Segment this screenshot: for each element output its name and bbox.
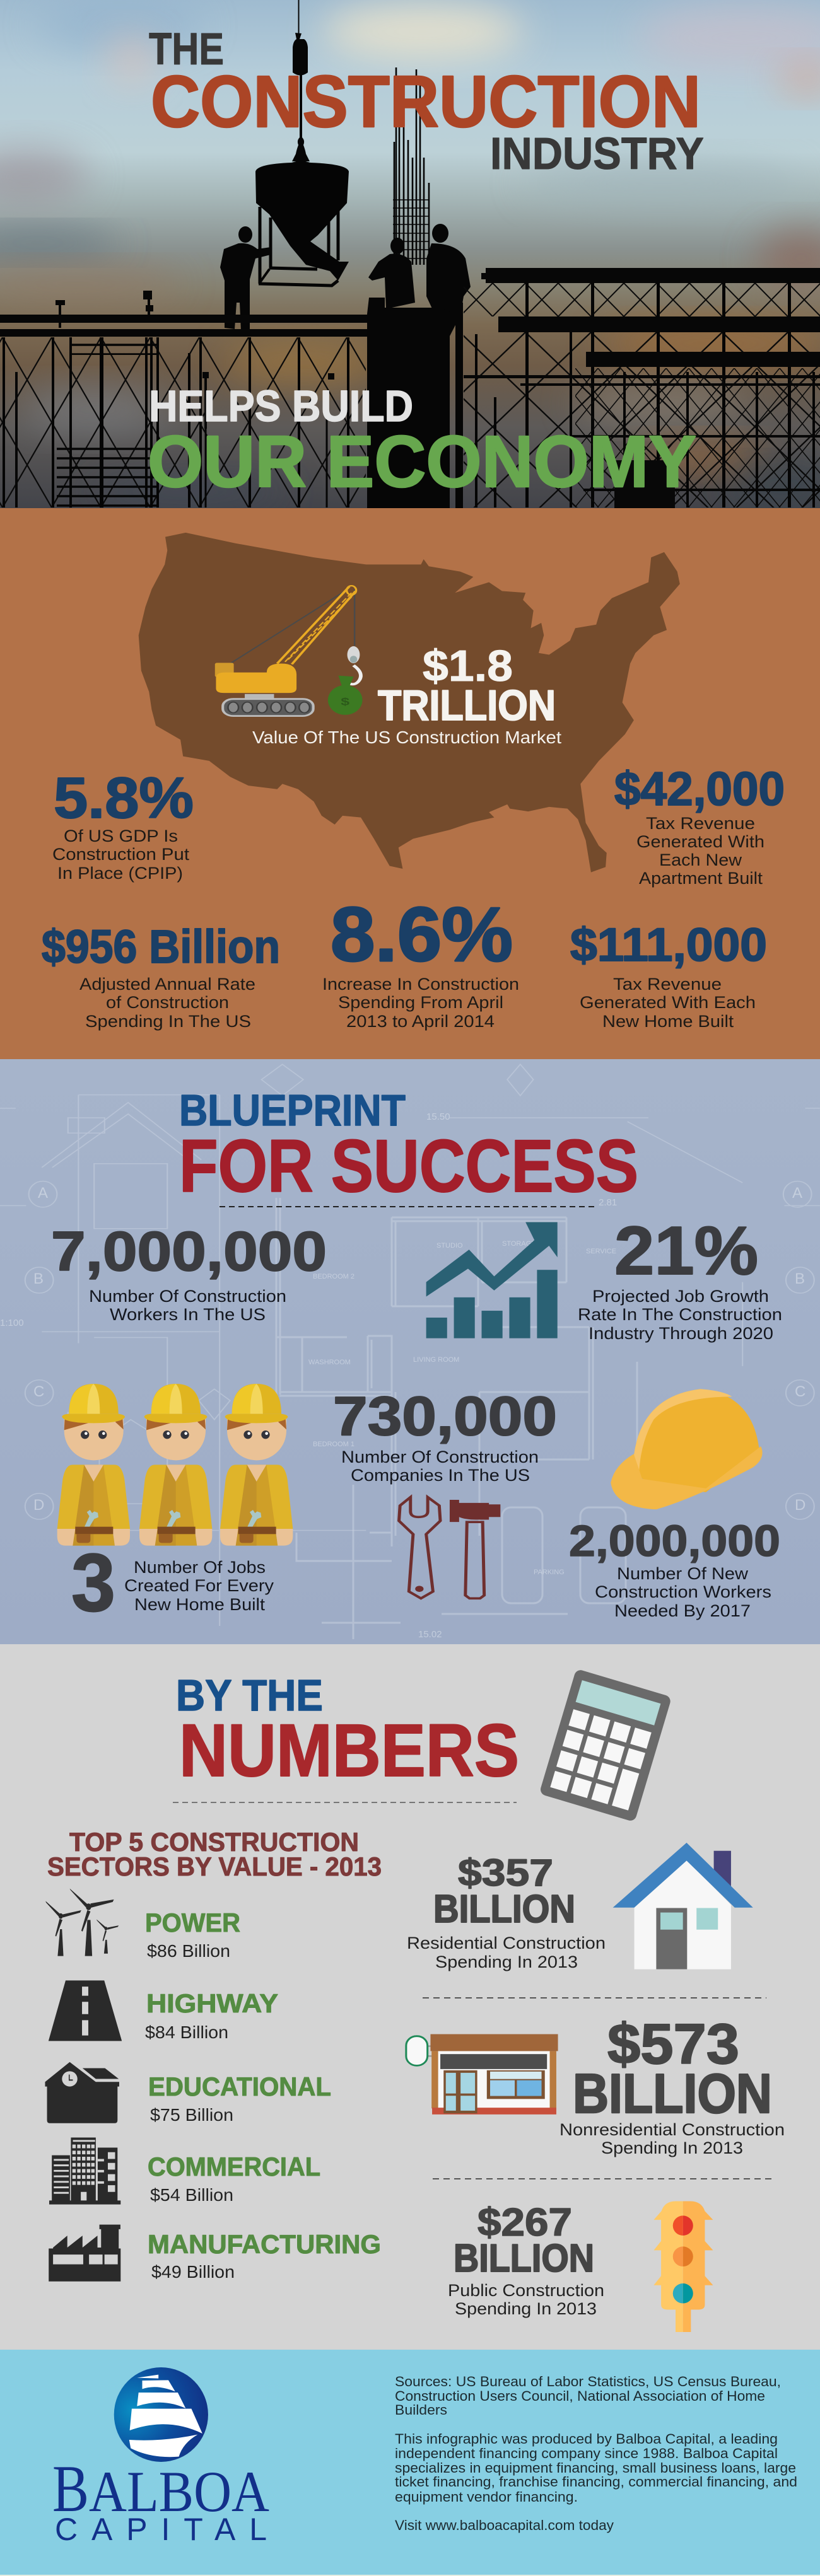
stat: $267 billion public: Public Construction <box>448 2281 604 2300</box>
workers silhouettes <box>220 224 471 337</box>
panel: blueprint for success: C <box>795 1383 805 1400</box>
sector: power: POWER <box>145 1908 240 1937</box>
stat: 8.6% <box>322 891 519 1031</box>
stat: 3 jobs <box>71 1536 274 1628</box>
title: The Construction Industry: THE <box>149 25 224 74</box>
sector: highway <box>145 1988 278 2042</box>
heading: By the Numbers <box>176 1671 519 1792</box>
stat: 3 jobs: Created For Every <box>124 1576 274 1595</box>
panel: blueprint for success: A <box>792 1185 802 1202</box>
icon: storefront <box>406 2034 558 2115</box>
stat: 3 jobs: Number Of Jobs <box>134 1558 266 1577</box>
icon: wrench and hammer <box>399 1497 500 1598</box>
stat: 8.6%: Increase In Construction <box>322 975 519 994</box>
stat: $42,000 <box>614 762 785 888</box>
panel: blueprint for success: SERVICE <box>586 1248 616 1255</box>
panel: hero <box>0 0 820 508</box>
logo: Balboa Capital: B <box>52 2452 89 2526</box>
icon: three workers <box>57 1384 293 1546</box>
stat: 21% <box>578 1212 782 1343</box>
stat: $111,000: Generated With Each <box>580 993 756 1012</box>
sector: educational <box>148 2072 331 2125</box>
stat: $956 Billion: $956 Billion <box>42 920 280 973</box>
panel: footer <box>0 2350 820 2576</box>
icon: house <box>613 1843 753 1970</box>
sector: manufacturing: $49 Billion <box>151 2262 235 2282</box>
panel: by the numbers <box>0 1644 820 2350</box>
icon: factory <box>49 2225 120 2282</box>
stat: $1.8 trillion: $1.8 <box>423 641 513 690</box>
sector: highway: HIGHWAY <box>146 1988 278 2018</box>
panel: blueprint for success: STORAGE <box>502 1240 536 1248</box>
stat: $1.8 trillion: Value Of The US Construction Market <box>252 728 561 747</box>
text: about: equipment vendor financing. <box>395 2489 578 2505</box>
stat: $573 billion nonresidential <box>559 2013 785 2157</box>
stat: 730,000: Companies In The US <box>351 1466 530 1485</box>
text: sources: Sources: US Bureau of Labor Statistics, US Census Bureau, <box>395 2374 781 2389</box>
rebar column <box>393 67 429 265</box>
stat: 21%: 21% <box>614 1212 758 1289</box>
stat: 7,000,000: Workers In The US <box>110 1305 266 1324</box>
stat: 2,000,000 <box>569 1516 780 1620</box>
sector: manufacturing <box>148 2229 381 2282</box>
panel: blueprint for success: STUDIO <box>436 1242 463 1250</box>
stat: 2,000,000: Construction Workers <box>595 1582 771 1601</box>
stat: $573 billion nonresidential: Nonresidential Construction <box>559 2120 785 2139</box>
stat: 5.8%: Construction Put <box>52 845 190 864</box>
title: Helps Build Our Economy: OUR ECONOMY <box>148 421 696 502</box>
stat: 7,000,000 <box>51 1220 327 1324</box>
stat: $573 billion nonresidential: BILLION <box>573 2062 772 2125</box>
sector: manufacturing: MANUFACTURING <box>148 2229 381 2259</box>
text: sources: Construction Users Council, National Association of Home <box>395 2388 765 2404</box>
bucket frame <box>259 207 338 286</box>
panel: blueprint for success: D <box>33 1497 44 1514</box>
sector: highway: $84 Billion <box>145 2022 228 2042</box>
stat: $1.8 trillion: TRILLION <box>378 682 556 729</box>
stat: $357 billion residential <box>407 1852 606 1971</box>
stat: 2,000,000: 2,000,000 <box>569 1516 780 1565</box>
heading: Blueprint for Success <box>179 1086 638 1208</box>
stat: $42,000: Generated With <box>636 832 764 851</box>
left scaffolding <box>0 291 367 508</box>
title: Helps Build Our Economy <box>148 381 696 502</box>
panel: blueprint for success: 2.81 <box>599 1197 617 1208</box>
heading: top 5 sectors <box>47 1827 382 1881</box>
heading: Blueprint for Success: FOR SUCCESS <box>179 1125 638 1208</box>
stat: 730,000: 730,000 <box>333 1386 557 1447</box>
stat: 8.6%: 8.6% <box>331 891 513 977</box>
heading: By the Numbers: BY THE <box>176 1671 323 1720</box>
panel: economy stats <box>0 508 820 1059</box>
central concrete column <box>367 298 463 508</box>
heading: By the Numbers: NUMBERS <box>179 1709 519 1792</box>
stat: $111,000: Tax Revenue <box>613 975 722 994</box>
icon: calculator <box>539 1669 672 1822</box>
panel: blueprint for success: WASHROOM <box>308 1359 351 1366</box>
right scaffolding <box>464 268 820 508</box>
stat: 3 jobs: New Home Built <box>134 1595 266 1614</box>
stat: $42,000: Apartment Built <box>639 869 763 888</box>
title: The Construction Industry: CONSTRUCTION <box>151 61 701 142</box>
stat: $111,000 <box>570 919 767 1031</box>
concrete bucket silhouette <box>255 160 349 281</box>
logo: Balboa Capital: CAPITAL <box>55 2512 267 2547</box>
stat: 3 jobs: 3 <box>71 1536 115 1628</box>
stat: $956 Billion: of Construction <box>106 993 229 1012</box>
stat: $42,000: Each New <box>659 850 742 869</box>
panel: blueprint for success: PARKING <box>534 1569 565 1576</box>
stat: 21%: Rate In The Construction <box>578 1305 782 1324</box>
icon: crane with money bag <box>215 586 363 716</box>
stat: $357 billion residential: $357 <box>458 1852 553 1894</box>
stat: 7,000,000: Number Of Construction <box>89 1287 286 1306</box>
panel: blueprint for success: BEDROOM 1 <box>313 1441 354 1448</box>
sector: commercial: COMMERCIAL <box>148 2152 320 2181</box>
panel: blueprint for success: 1:100 <box>0 1318 24 1328</box>
stat: $956 Billion: Spending In The US <box>85 1012 251 1031</box>
icon: school <box>45 2062 119 2123</box>
sector: educational: $75 Billion <box>150 2105 233 2125</box>
text: about: independent financing company since 1988. Balboa Capital <box>395 2445 778 2461</box>
stat: $111,000: New Home Built <box>602 1012 734 1031</box>
sector: commercial: $54 Billion <box>150 2185 233 2205</box>
text: about: ticket financing, franchise financing, commercial financing, and <box>395 2474 797 2490</box>
heading: Blueprint for Success: BLUEPRINT <box>179 1086 406 1135</box>
stat: 2,000,000: Needed By 2017 <box>614 1601 751 1620</box>
heading: top 5 sectors: TOP 5 CONSTRUCTION <box>69 1827 359 1857</box>
title: The Construction Industry <box>149 25 704 179</box>
stat: 21%: Projected Job Growth <box>592 1287 769 1306</box>
stat: 5.8%: 5.8% <box>54 766 194 830</box>
icon: wind turbines <box>45 1888 119 1956</box>
stat: $267 billion public: BILLION <box>454 2237 594 2280</box>
stat: $357 billion residential: Spending In 2013 <box>435 1952 578 1971</box>
panel: blueprint for success: D <box>795 1497 805 1514</box>
stat: 5.8% <box>52 766 194 883</box>
icon: highway <box>49 1980 122 2041</box>
stat: $357 billion residential: Residential Construction <box>407 1934 606 1952</box>
sector: power: $86 Billion <box>147 1941 230 1961</box>
logo: Balboa Capital <box>52 2367 269 2547</box>
stat: 2,000,000: Number Of New <box>617 1564 749 1583</box>
sector: power <box>145 1908 240 1961</box>
stat: $357 billion residential: BILLION <box>433 1888 575 1931</box>
stat: $573 billion nonresidential: $573 <box>607 2013 739 2076</box>
panel: blueprint for success: 15.50 <box>426 1111 450 1122</box>
sector: educational: EDUCATIONAL <box>148 2072 331 2101</box>
panel: blueprint for success: 15.02 <box>418 1629 442 1640</box>
panel: blueprint for success: C <box>33 1383 44 1400</box>
sector: commercial <box>148 2152 320 2205</box>
text: about: specializes in equipment financing, small business loans, large <box>395 2460 796 2476</box>
stat: $42,000: Tax Revenue <box>646 814 755 833</box>
stat: 21%: Industry Through 2020 <box>589 1324 773 1343</box>
panel: blueprint for success <box>0 1059 820 1644</box>
title: The Construction Industry: INDUSTRY <box>490 129 704 179</box>
stat: 5.8%: Of US GDP Is <box>64 827 178 845</box>
title: Helps Build Our Economy: HELPS BUILD <box>149 381 413 431</box>
stat: 7,000,000: 7,000,000 <box>51 1220 327 1282</box>
stat: $267 billion public <box>448 2201 604 2318</box>
stat: $1.8 trillion <box>252 641 561 747</box>
icon: growth chart <box>426 1222 558 1338</box>
icon: crane with money bag: $ <box>341 696 349 708</box>
stat: 5.8%: In Place (CPIP) <box>57 864 183 883</box>
icon: office buildings <box>49 2138 120 2205</box>
stat: $956 Billion: Adjusted Annual Rate <box>79 975 255 994</box>
icon: traffic light <box>653 2201 713 2332</box>
icon: hard hat <box>611 1389 763 1509</box>
stat: $267 billion public: Spending In 2013 <box>455 2299 597 2318</box>
stat: $956 Billion <box>42 920 280 1031</box>
text: visit website: Visit www.balboacapital.com today <box>395 2517 614 2533</box>
panel: blueprint for success: BEDROOM 2 <box>313 1273 354 1280</box>
text: sources <box>395 2374 781 2418</box>
panel: blueprint for success: B <box>33 1270 44 1287</box>
sky background <box>0 0 820 508</box>
stat: 730,000 <box>333 1386 557 1485</box>
stat: $42,000: $42,000 <box>614 762 785 815</box>
logo: Balboa Capital: ALBOA <box>89 2459 269 2524</box>
text: about <box>395 2431 797 2505</box>
panel: blueprint for success: LIVING ROOM <box>413 1356 459 1364</box>
stat: $573 billion nonresidential: Spending In 2013 <box>601 2138 743 2157</box>
panel: blueprint for success: B <box>795 1270 805 1287</box>
stat: $111,000: $111,000 <box>570 919 767 971</box>
stat: $267 billion public: $267 <box>477 2201 572 2244</box>
panel: blueprint for success: A <box>38 1185 48 1202</box>
stat: 730,000: Number Of Construction <box>341 1448 539 1466</box>
stat: 8.6%: Spending From April <box>338 993 503 1012</box>
map of the United States <box>139 533 680 873</box>
crane hook and cable <box>292 0 310 161</box>
text: sources: Builders <box>395 2402 447 2418</box>
stat: 8.6%: 2013 to April 2014 <box>346 1012 495 1031</box>
text: about: This infographic was produced by Balboa Capital, a leading <box>395 2431 778 2447</box>
heading: top 5 sectors: SECTORS BY VALUE - 2013 <box>47 1852 382 1881</box>
